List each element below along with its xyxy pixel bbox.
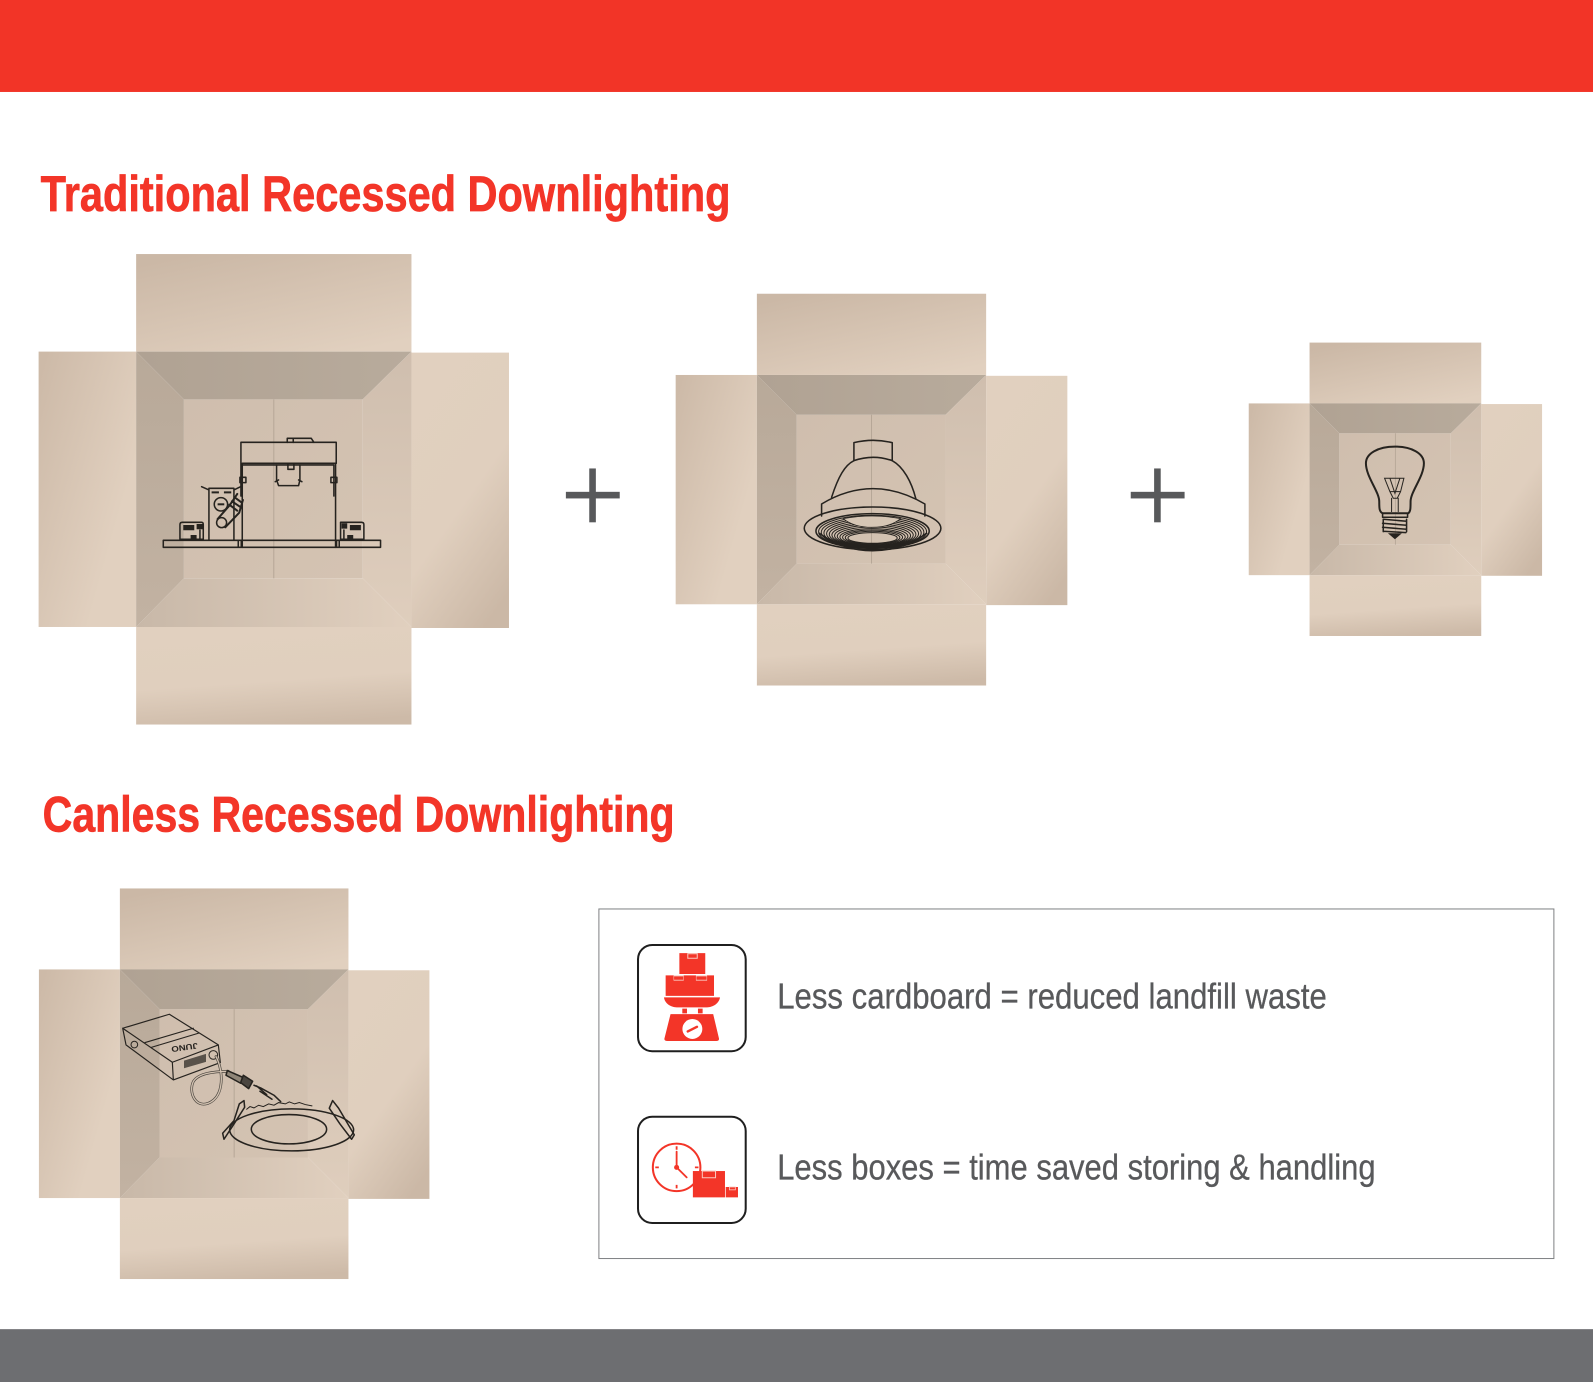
- bottom inner wall: [1310, 545, 1481, 575]
- right flap: [411, 353, 509, 628]
- small carton: [726, 1187, 738, 1197]
- dome: [832, 457, 916, 499]
- baffle rings: [816, 514, 929, 551]
- large carton: [693, 1171, 725, 1197]
- cable loop: [192, 1057, 228, 1104]
- text: less boxes: Less boxes = time saved storing & handling: [777, 1146, 1376, 1187]
- open box: recessed housing: [39, 254, 509, 725]
- left flap: [1249, 403, 1310, 575]
- top flap: [1310, 343, 1481, 403]
- small carton tape: [729, 1187, 735, 1190]
- flange plate: [163, 540, 381, 547]
- cable connector: [226, 1071, 243, 1083]
- large carton tape: [702, 1171, 716, 1178]
- heading: canless: Canless Recessed Downlighting: [43, 786, 675, 843]
- clock ticks: [655, 1146, 698, 1188]
- text: less cardboard: Less cardboard = reduced landfill waste: [777, 976, 1327, 1017]
- left connector box: [180, 522, 203, 539]
- icon: canless downlight line drawing: [123, 1014, 354, 1151]
- top flap: [757, 294, 986, 375]
- top plate: [287, 438, 314, 442]
- right connector box: [341, 522, 364, 539]
- floor seam: [233, 1009, 235, 1158]
- glass envelope: [1366, 447, 1424, 513]
- left inner wall: [1310, 403, 1339, 575]
- bottom inner wall: [757, 564, 986, 604]
- icon: baffle trim line drawing: [804, 440, 941, 551]
- lower carton: [666, 975, 714, 996]
- top flap: [120, 888, 348, 969]
- outer trim ring: [804, 507, 941, 550]
- top inner wall: [1310, 403, 1481, 433]
- right inner wall: [946, 375, 986, 604]
- bottom flap: [1310, 575, 1481, 636]
- left inner wall: [757, 375, 797, 604]
- bottom flap: [136, 627, 411, 725]
- ring inner: [251, 1115, 327, 1144]
- clock hub: [674, 1165, 679, 1170]
- right flap: [348, 970, 429, 1199]
- right inner wall: [1451, 403, 1481, 575]
- collar: [822, 489, 925, 516]
- left spring clip: [223, 1101, 245, 1139]
- socket cap: [854, 440, 892, 461]
- open box: light bulb: [1249, 343, 1542, 636]
- base tip: [1388, 533, 1402, 539]
- left inner wall: [120, 969, 160, 1198]
- screw base: [1383, 513, 1408, 533]
- right flap: [1481, 404, 1542, 576]
- box floor: [184, 399, 363, 578]
- cartons tape: [674, 954, 707, 980]
- baffle opening highlight: [843, 516, 901, 527]
- can body: [241, 442, 336, 547]
- right spring clip: [329, 1101, 354, 1139]
- bottom flap: [120, 1198, 348, 1279]
- top inner wall: [120, 969, 348, 1009]
- brand mark: JUNO: [171, 1041, 198, 1054]
- driver port: [209, 1051, 218, 1059]
- right flap: [986, 376, 1067, 605]
- icon: light bulb line drawing: [1366, 447, 1424, 539]
- floor seam: [871, 415, 873, 564]
- side clips: [240, 465, 337, 496]
- floor seam: [273, 399, 275, 578]
- right inner wall: [363, 352, 411, 627]
- open box: canless downlight: [39, 888, 429, 1279]
- ring outer: [230, 1109, 354, 1151]
- clock hands: [677, 1152, 687, 1177]
- scale bowl: [664, 997, 720, 1007]
- icon frame: [638, 1117, 746, 1223]
- scale base: [664, 1014, 719, 1041]
- heading: traditional: Traditional Recessed Downlighting: [41, 165, 730, 222]
- box floor: [160, 1009, 308, 1158]
- filament: [1385, 478, 1404, 512]
- icon: recessed housing line drawing: [163, 438, 381, 547]
- bottom inner wall: [136, 578, 411, 627]
- header band: [0, 0, 1593, 92]
- icon frame: [638, 945, 746, 1051]
- icon: scale with boxes: [638, 945, 746, 1051]
- left flap: [39, 969, 120, 1198]
- floor seam: [1394, 433, 1396, 545]
- clock face: [653, 1144, 700, 1191]
- benefits panel: [599, 909, 1554, 1259]
- panel border: [599, 909, 1554, 1259]
- socket clip: [275, 463, 302, 486]
- ring back edge: [247, 1102, 312, 1109]
- left flap: [676, 375, 757, 604]
- scale stems: [682, 1009, 703, 1013]
- top inner wall: [136, 352, 411, 399]
- junction box: [202, 487, 241, 540]
- driver box: [123, 1014, 220, 1080]
- top inner wall: [757, 375, 986, 415]
- knockout circle: [214, 498, 228, 511]
- open box: baffle trim: [676, 294, 1067, 686]
- bottom flap: [757, 604, 986, 686]
- dial needle: [688, 1027, 697, 1031]
- left inner wall: [136, 352, 184, 627]
- top flap: [136, 254, 411, 352]
- plus sign 1: [566, 468, 620, 522]
- upper carton: [679, 953, 705, 974]
- footer band: [0, 1329, 1593, 1382]
- bottom inner wall: [120, 1158, 348, 1198]
- icon: clock with boxes: [638, 1117, 746, 1223]
- left flap: [39, 352, 136, 627]
- plus sign 2: [1131, 468, 1185, 522]
- box floor: [1339, 433, 1451, 545]
- scale dial: [682, 1019, 702, 1039]
- driver vent: [184, 1054, 206, 1068]
- right inner wall: [308, 969, 348, 1198]
- flex conduit: [218, 494, 243, 527]
- box floor: [797, 415, 946, 564]
